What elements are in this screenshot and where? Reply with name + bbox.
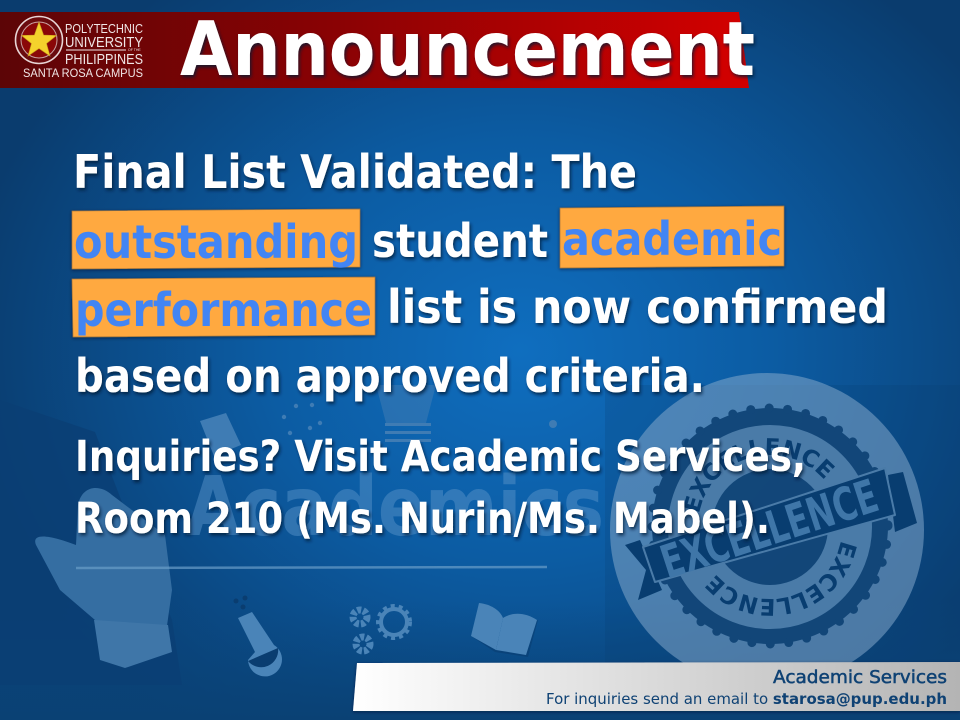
footer bar: [353, 662, 960, 711]
excellence seal: EXCELLENCE: [684, 438, 835, 512]
title: Announcement: [180, 5, 755, 93]
footer bar: For inquiries send an email to starosa@pup.edu.ph: [546, 690, 947, 708]
logo seal: [16, 16, 62, 64]
logo wordmark: POLYTECHNIC: [65, 22, 143, 36]
excellence seal: EXCELLENCE: [705, 542, 857, 616]
footer bar: Academic Services: [773, 668, 947, 688]
inquiries text: Room 210 (Ms. Nurin/Ms. Mabel).: [75, 494, 770, 544]
excellence seal: [610, 373, 924, 662]
line 1: Final List Validated: The: [73, 145, 637, 199]
icon: flask: [234, 596, 282, 676]
icon: open book: [471, 603, 538, 657]
logo wordmark: OF THE: [128, 48, 141, 52]
logo wordmark: UNIVERSITY: [65, 35, 143, 51]
highlight: performance: performance: [75, 283, 372, 337]
logo wordmark: PHILIPPINES: [65, 52, 143, 68]
highlight: academic: academic: [562, 212, 782, 266]
logo wordmark: SANTA ROSA CAMPUS: [23, 68, 143, 80]
main message: [72, 145, 888, 403]
word: Academics: Academics: [186, 460, 604, 555]
inquiries text: [75, 432, 806, 544]
logo wordmark: [23, 22, 143, 80]
small icons: [200, 385, 557, 456]
background image: academics illustration: [0, 385, 604, 685]
icon: gears: [353, 606, 410, 651]
header banner: [0, 5, 755, 93]
word: student: student: [372, 214, 548, 268]
line 3 remainder: list is now confirmed: [387, 280, 888, 334]
line 4: based on approved criteria.: [75, 349, 705, 403]
suit and hand: [0, 400, 547, 685]
highlight: outstanding: outstanding: [74, 215, 358, 269]
inquiries text: Inquiries? Visit Academic Services,: [75, 432, 806, 482]
